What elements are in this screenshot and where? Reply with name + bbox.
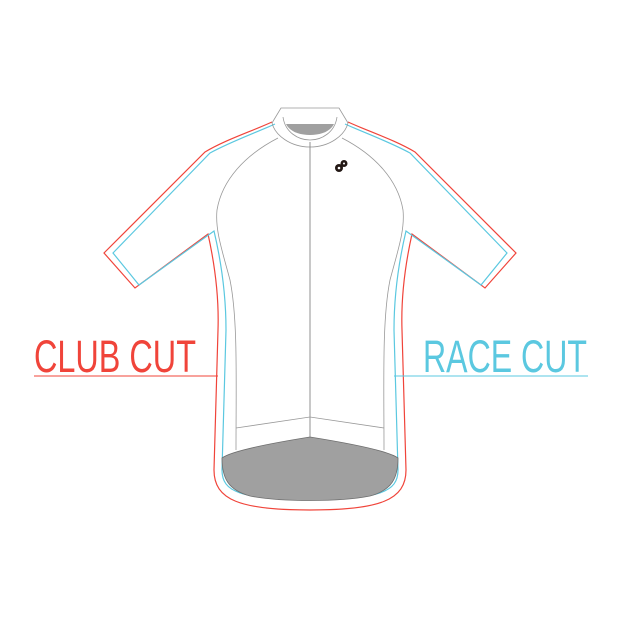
label: club cut: CLUB CUT (34, 331, 196, 382)
jersey body details (217, 108, 403, 450)
blue outline: race cut (113, 124, 507, 499)
gray collar inner (286, 124, 334, 135)
gray hem band (222, 437, 398, 500)
red outline: club cut (104, 122, 516, 510)
icon: logo (335, 160, 348, 172)
